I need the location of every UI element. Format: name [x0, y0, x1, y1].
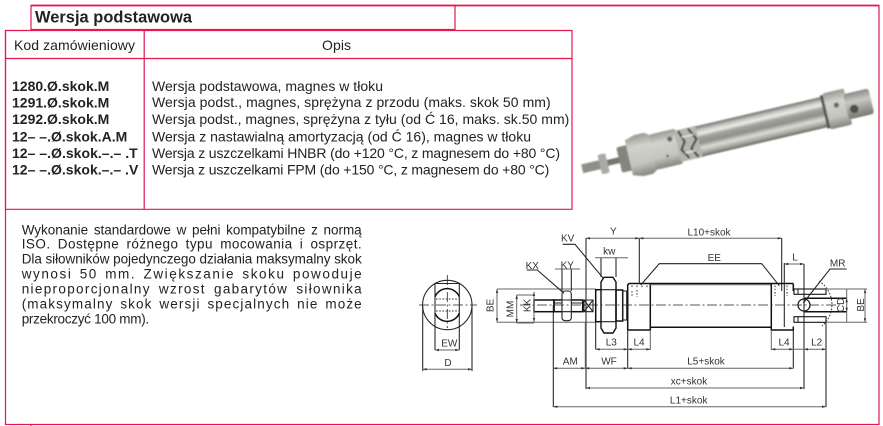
mechanism section — [674, 125, 705, 162]
dimension labels: L4 — [633, 337, 645, 348]
dimension labels: L10+skok — [687, 227, 732, 238]
vertical dimensions: CD — [836, 298, 847, 312]
title box — [31, 6, 455, 30]
description paragraph: ISO. Dostępne różnego typu mocowania i osprzęt. — [22, 236, 362, 251]
clevis — [843, 88, 874, 120]
dimension EW: EW — [441, 338, 458, 349]
hex nut — [601, 277, 616, 333]
dimension labels: MR — [830, 258, 845, 269]
order codes: 1291.Ø.skok.M — [12, 94, 109, 110]
dimension labels: KX — [526, 261, 539, 272]
dimension labels: L1+skok — [670, 395, 708, 406]
description paragraph: Dla siłowników pojedynczego działania maksymalny skok — [22, 251, 362, 266]
dimension labels: L — [792, 252, 798, 263]
dimension labels — [526, 227, 845, 406]
dimension labels: L5+skok — [687, 356, 726, 367]
side view technical drawing — [486, 227, 867, 408]
description paragraph: (maksymalny skok wersji specjalnych nie może — [22, 296, 362, 311]
front nut — [624, 132, 658, 178]
description paragraph — [21, 222, 362, 326]
column header: order code: Kod zamówieniowy — [14, 37, 135, 53]
order codes: 12– –.Ø.skok.–.– .V — [12, 162, 139, 178]
order codes: 1280.Ø.skok.M — [12, 78, 109, 94]
cylinder tube — [696, 97, 829, 157]
dimension D: D — [444, 358, 452, 369]
front head — [648, 128, 684, 170]
order codes: 1292.Ø.skok.M — [12, 111, 109, 127]
cylinder body — [628, 284, 793, 330]
dimension labels: xc+skok — [671, 376, 708, 387]
description paragraph: przekroczyć 100 mm). — [22, 311, 149, 326]
dimension labels: EE — [708, 253, 721, 264]
vertical dimensions — [486, 289, 867, 323]
dimension labels: WF — [601, 357, 617, 368]
end view drawing — [419, 275, 477, 371]
dimension lines — [553, 238, 826, 407]
order codes: 12– –.Ø.skok.A.M — [12, 128, 127, 144]
dimension labels: KY — [561, 260, 574, 272]
rear clevis — [794, 281, 847, 326]
descriptions: Wersja z uszczelkami HNBR (do +120 °C, z magnesem do +80 °C) — [152, 145, 560, 161]
vertical dimensions: BE — [856, 298, 867, 312]
dimension labels: Y — [610, 227, 617, 238]
threaded neck — [616, 144, 638, 173]
description paragraph: wynosi 50 mm. Zwiększanie skoku powoduje — [21, 266, 362, 281]
descriptions: Wersja podst., magnes, sprężyna z przodu (maks. skok 50 mm) — [152, 94, 551, 110]
cylinder photo — [577, 81, 876, 189]
dimension labels: AM — [563, 356, 578, 367]
descriptions: Wersja z nastawialną amortyzacją (od Ć 16), magnes w tłoku — [152, 128, 531, 144]
descriptions: Wersja podst., magnes, sprężyna z tyłu (od Ć 16, maks. sk.50 mm) — [152, 111, 569, 127]
description paragraph: Wykonanie standardowe w pełni kompatybilne z normą — [22, 222, 362, 237]
dimension labels: L3 — [606, 337, 617, 348]
order codes — [12, 78, 139, 178]
dimension labels: L2 — [811, 337, 823, 348]
vertical dimensions: KK — [522, 299, 533, 312]
piston rod and nut — [497, 277, 627, 333]
centre line — [520, 304, 840, 306]
dimension labels: KV — [561, 233, 575, 244]
leader lines — [527, 244, 847, 303]
descriptions — [152, 78, 569, 178]
dimension arrows — [553, 237, 826, 408]
rear head — [822, 88, 852, 130]
vertical dimensions: MM — [506, 301, 517, 317]
ring — [820, 95, 831, 129]
description paragraph: nieproporcjonalny wzrost gabarytów siłownika — [22, 281, 362, 296]
vertical dimensions: BE — [486, 299, 497, 312]
order codes: 12– –.Ø.skok.–.– .T — [12, 145, 138, 161]
threaded rod end — [581, 159, 607, 173]
column header: description: Opis — [322, 37, 351, 53]
dimension labels: L4 — [778, 337, 790, 348]
descriptions: Wersja podstawowa, magnes w tłoku — [152, 78, 383, 94]
dimension labels: kw — [603, 246, 616, 258]
descriptions: Wersja z uszczelkami FPM (do +150 °C, z magnesem do +80 °C) — [152, 162, 549, 178]
order code table — [6, 30, 572, 209]
title: Wersja podstawowa — [35, 9, 193, 27]
